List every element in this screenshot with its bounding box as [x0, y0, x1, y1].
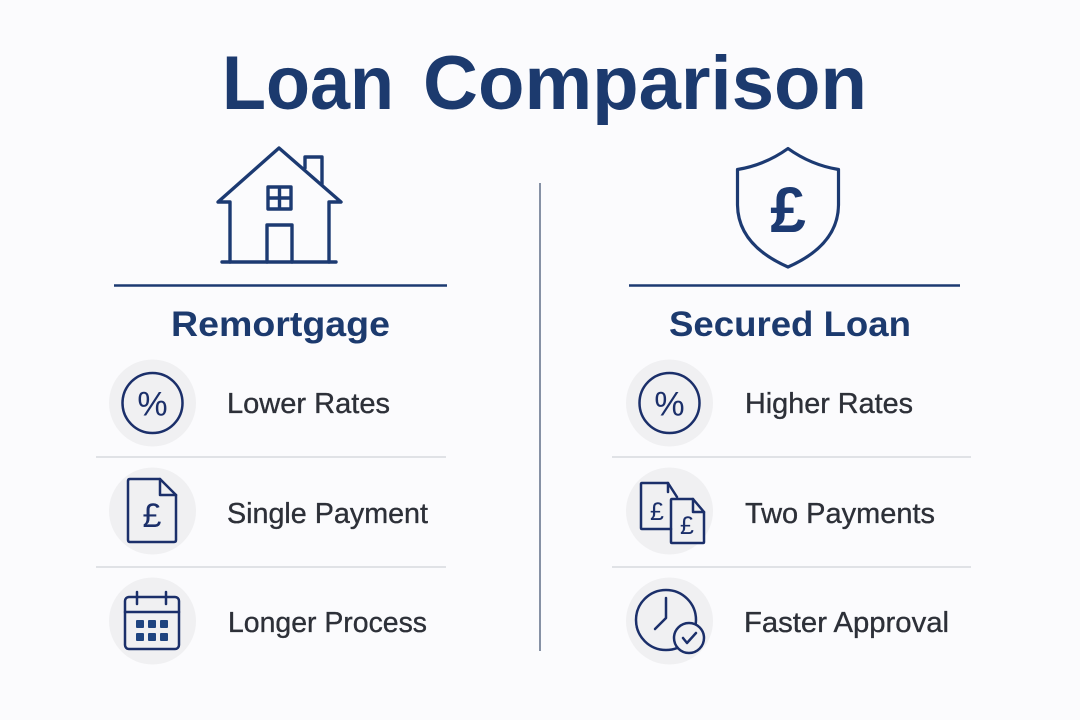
row: longer process: Longer Process — [228, 607, 427, 639]
title: Comparison — [423, 41, 867, 126]
row divider — [612, 566, 971, 568]
row: higher rates: % — [654, 386, 685, 424]
row: lower rates — [109, 360, 390, 446]
row: higher rates — [626, 360, 913, 446]
row: faster approval — [626, 578, 949, 664]
panel: secured loan — [612, 148, 971, 664]
row: higher rates: Higher Rates — [745, 388, 913, 420]
icon: shield: £ — [770, 174, 806, 246]
row: two payments: £ — [680, 512, 694, 540]
row: two payments: £ — [650, 498, 664, 526]
row divider — [96, 566, 446, 568]
center divider — [539, 183, 541, 651]
icon: house — [218, 148, 341, 262]
row: single payment — [109, 468, 428, 554]
row: lower rates: Lower Rates — [227, 388, 390, 420]
row: single payment: Single Payment — [227, 498, 428, 530]
panel: remortgage — [96, 148, 447, 664]
row divider — [96, 456, 446, 458]
heading: secured loan: Secured Loan — [669, 305, 911, 344]
row: faster approval: Faster Approval — [744, 607, 949, 639]
heading: remortgage: Remortgage — [171, 305, 390, 344]
icon: shield — [738, 148, 838, 267]
row: lower rates: % — [137, 386, 168, 424]
row: two payments: Two Payments — [745, 498, 935, 530]
row divider — [612, 456, 971, 458]
title: Loan — [222, 41, 394, 126]
header rule — [114, 284, 447, 287]
row: two payments — [626, 468, 935, 554]
row: single payment: £ — [143, 497, 162, 535]
header rule — [629, 284, 960, 287]
title — [222, 41, 867, 126]
row: longer process — [109, 578, 427, 664]
